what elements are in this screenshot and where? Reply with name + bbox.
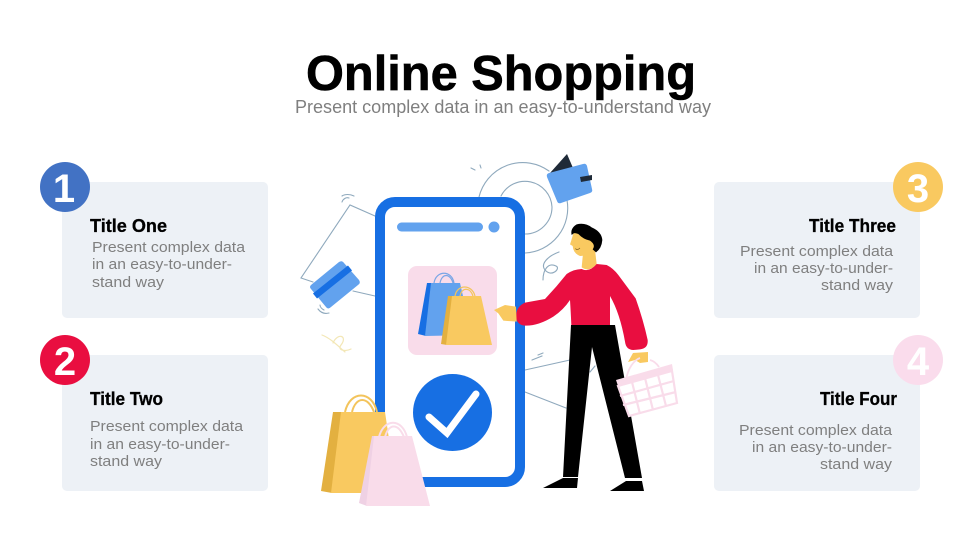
icon: check mark — [413, 374, 492, 451]
text block: title three description: stand way — [821, 277, 894, 294]
head and torso, drawn in enlarged coordinates — [494, 224, 648, 350]
badge: number 4 — [893, 335, 943, 385]
illustration: online shopping scene — [301, 154, 677, 506]
panel: title one — [40, 162, 268, 318]
badge: number 1 — [40, 162, 90, 212]
text block: title two description: in an easy-to-under- — [90, 436, 230, 453]
text block: title one description: in an easy-to-under- — [92, 256, 232, 273]
text block: title two description — [90, 418, 244, 470]
smile — [575, 248, 580, 250]
hand holding basket — [628, 352, 648, 363]
panel: title two — [40, 335, 268, 491]
icon: pink bag — [359, 423, 430, 506]
badge: number 3 — [893, 162, 943, 212]
icon: yellow shopping bag — [441, 287, 492, 345]
icon: blue shopping bag — [418, 273, 472, 336]
face — [570, 232, 595, 256]
person — [494, 224, 677, 491]
text block: title three description — [740, 243, 894, 294]
phone — [380, 202, 520, 482]
text block: title one description — [92, 239, 246, 291]
pants — [563, 325, 642, 478]
heading: title four: Title Four — [820, 389, 897, 409]
text block: title one description: Present complex data — [92, 239, 246, 256]
product tile with bags — [408, 266, 497, 355]
hair — [571, 224, 602, 252]
badge: number 2: 2 — [54, 340, 76, 384]
shoes — [543, 478, 644, 491]
title: Online Shopping — [306, 47, 696, 101]
subtitle: Present complex data in an easy-to-understand way — [295, 97, 711, 117]
text block: title two description: Present complex data — [90, 418, 244, 435]
text block: title four description: Present complex data — [739, 422, 893, 439]
text block: title four description: stand way — [820, 456, 893, 473]
heading: title one: Title One — [90, 216, 167, 236]
neck — [582, 250, 597, 269]
text block: title three description: Present complex data — [740, 243, 894, 260]
badge: number 3: 3 — [907, 167, 929, 211]
phone dot button — [488, 222, 500, 232]
badge: number 4: 4 — [907, 340, 930, 384]
heading: title three: Title Three — [809, 216, 896, 236]
icon: yellow bag — [321, 396, 397, 493]
badge: number 2 — [40, 335, 90, 385]
text block: title four description: in an easy-to-under- — [752, 439, 892, 456]
phone search bar — [397, 222, 483, 232]
text block: title three description: in an easy-to-under- — [754, 260, 893, 277]
shopping basket — [616, 358, 677, 416]
heading: title two: Title Two — [90, 389, 163, 409]
panel: title four — [714, 335, 943, 491]
badge: number 1: 1 — [53, 167, 75, 211]
background line decorations — [301, 163, 595, 408]
hand pointing — [494, 305, 517, 322]
text block: title one description: stand way — [92, 274, 165, 291]
icon: wallet — [547, 154, 592, 203]
panel: title three — [714, 162, 943, 318]
sweater — [516, 264, 648, 350]
icon: credit card — [310, 261, 360, 308]
shopping bags on floor — [321, 396, 430, 506]
text block: title two description: stand way — [90, 453, 163, 470]
text block: title four description — [739, 422, 893, 473]
